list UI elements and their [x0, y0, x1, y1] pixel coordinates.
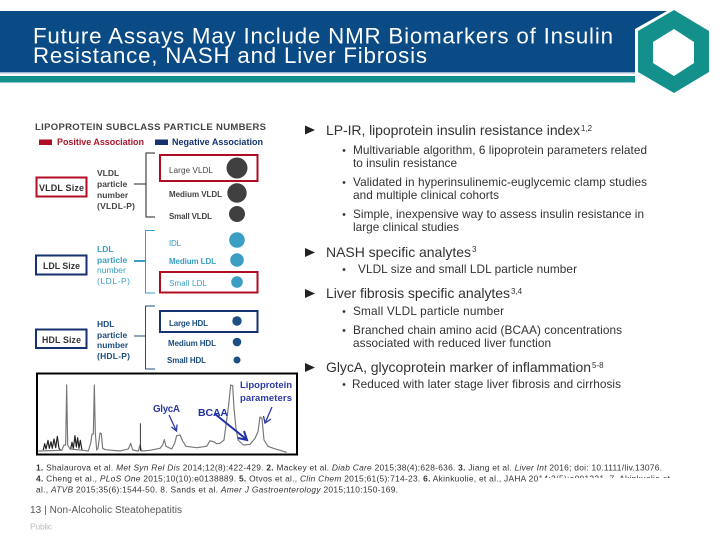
NASH section: VLDL size and small LDL particle number — [358, 262, 577, 276]
LDL group: Medium LDL — [169, 257, 216, 266]
HDL group: HDL Size — [42, 335, 81, 345]
panel heading: LIPOPROTEIN SUBCLASS PARTICLE NUMBERS — [35, 122, 266, 133]
LDL group: LDL Size — [43, 261, 80, 271]
HDL group: (HDL-P) — [97, 351, 130, 361]
arrow: BCAA — [215, 414, 247, 440]
HDL group — [36, 306, 258, 369]
Liver fibrosis section: 3,4 — [511, 287, 523, 296]
text block: key biomarkers — [305, 122, 647, 391]
NASH section — [305, 244, 577, 276]
LP-IR section: LP-IR, lipoprotein insulin resistance index — [326, 122, 580, 138]
spectrum labels: BCAA — [198, 407, 228, 419]
VLDL group: (VLDL-P) — [97, 201, 135, 211]
HDL group: HDL — [97, 319, 114, 329]
VLDL group: number — [97, 190, 129, 200]
LDL group: (LDL-P) — [97, 276, 130, 286]
LP-IR section: Multivariable algorithm, 6 lipoprotein parameters related — [353, 143, 647, 157]
Liver fibrosis section: Branched chain amino acid (BCAA) concentrations — [353, 323, 622, 337]
panel: NMR spectrum chart — [37, 374, 297, 454]
NASH section: NASH specific analytes — [326, 244, 471, 260]
LDL group: number — [97, 265, 126, 275]
VLDL group: Medium VLDL — [169, 190, 222, 199]
LDL group: Small LDL — [169, 279, 208, 288]
LDL group: LDL — [97, 244, 114, 254]
panel: lipoprotein subclass diagram — [35, 122, 266, 369]
icon: hexagon logo — [638, 10, 709, 93]
LP-IR section: 1,2 — [581, 124, 593, 133]
LP-IR section: large clinical studies — [353, 220, 459, 234]
GlycA section: GlycA, glycoprotein marker of inflammation — [326, 359, 591, 375]
LP-IR section: to insulin resistance — [353, 156, 457, 170]
LP-IR section — [305, 122, 647, 234]
Liver fibrosis section: Small VLDL particle number — [353, 304, 504, 318]
references: al., ATVB 2015;35(6):1544-50. 8. Sands et al. Amer J Gastroenterology 2015;110:150-169. — [36, 485, 398, 495]
arrow: lipoprotein parameters — [264, 407, 272, 423]
spectrum trace — [38, 385, 287, 452]
HDL group: Medium HDL — [168, 339, 216, 348]
title: Future Assays May Include NMR Biomarkers of Insulin — [33, 23, 613, 48]
footer: classification: Public — [30, 522, 53, 532]
Liver fibrosis section: Liver fibrosis specific analytes — [326, 285, 510, 301]
NASH section: 3 — [472, 245, 477, 254]
HDL group: Small HDL — [167, 356, 206, 365]
spectrum labels: parameters — [240, 393, 292, 404]
HDL group: Large HDL — [169, 319, 208, 328]
LDL group: IDL — [169, 239, 182, 248]
VLDL group: VLDL — [97, 168, 119, 178]
Liver fibrosis section: associated with reduced liver function — [353, 336, 551, 350]
VLDL group: Large VLDL — [169, 166, 214, 175]
LP-IR section: Validated in hyperinsulinemic-euglycemic clamp studies — [353, 175, 647, 189]
Liver fibrosis section — [305, 285, 622, 350]
legend — [39, 137, 263, 147]
title: Resistance, NASH and Liver Fibrosis — [33, 43, 427, 68]
VLDL group: particle — [97, 179, 128, 189]
arrow: GlycA — [169, 415, 177, 431]
VLDL group: VLDL Size — [39, 183, 84, 193]
legend: Positive Association — [57, 137, 144, 147]
title — [33, 23, 613, 68]
GlycA section — [305, 359, 621, 391]
HDL group: particle — [97, 330, 128, 340]
references — [36, 463, 671, 495]
LP-IR section: and multiple clinical cohorts — [353, 188, 499, 202]
LDL group: particle — [97, 255, 128, 265]
LP-IR section: Simple, inexpensive way to assess insulin resistance in — [353, 207, 644, 221]
spectrum labels: Lipoprotein — [240, 380, 292, 391]
footer: page label: 13 | Non-Alcoholic Steatohepatitis — [30, 505, 182, 516]
legend: Negative Association — [172, 137, 263, 147]
references: 4. Cheng et al., PLoS One 2015;10(10):e0138889. 5. Otvos et al., Clin Chem 2015;61(5):714-23. 6. Akinkuolie, et al., JAHA 2014;3(5):e001221. 7. Akinkuolie et — [36, 474, 671, 484]
title banner — [0, 11, 667, 82]
LDL group — [36, 230, 258, 293]
spectrum labels — [153, 380, 292, 419]
GlycA section: Reduced with later stage liver fibrosis and cirrhosis — [352, 377, 621, 391]
HDL group: number — [97, 340, 129, 350]
spectrum labels: GlycA — [153, 404, 180, 415]
VLDL group: Small VLDL — [169, 212, 212, 221]
VLDL group — [36, 153, 258, 222]
GlycA section: 5-8 — [592, 361, 604, 370]
references: 1. Shalaurova et al. Met Syn Rel Dis 2014;12(8):422-429. 2. Mackey et al. Diab Care 2015;38(4):628-636. 3. Jiang et al. Liver Int 2016; doi: 10.1111/liv.13076. — [36, 463, 662, 473]
